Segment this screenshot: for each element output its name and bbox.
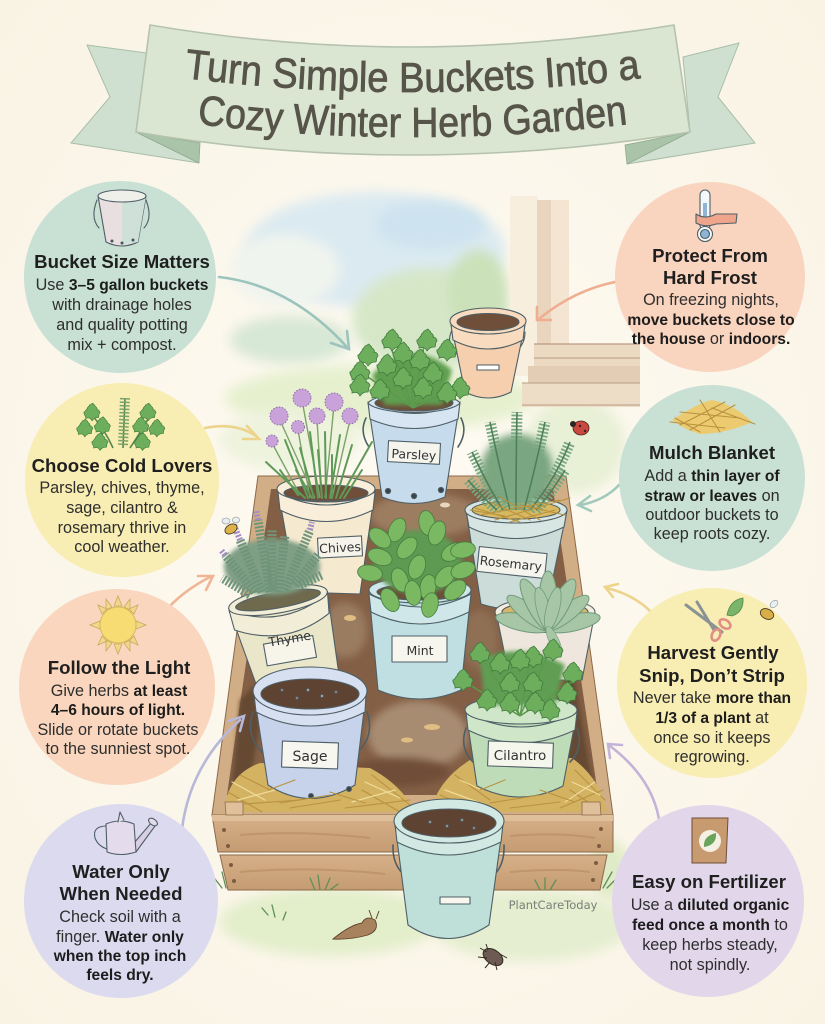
body text: keep herbs steady, <box>642 936 778 954</box>
body text: Add a thin layer of <box>644 467 780 485</box>
straw mulch in the bed <box>225 758 607 812</box>
body text: feels dry. <box>86 967 154 984</box>
label: Thyme: Thyme <box>266 627 312 650</box>
heading: Snip, Don’t Strip <box>639 665 785 686</box>
plant: sage herb <box>494 571 602 658</box>
heading: Protect From <box>652 245 768 266</box>
body text <box>627 291 795 348</box>
plant: thyme <box>221 510 322 595</box>
bucket: parsley <box>363 393 464 504</box>
body text: when the top inch <box>53 948 186 965</box>
title line 2: Cozy Winter Herb Garden <box>200 96 626 140</box>
body text: feed once a month to <box>632 916 788 934</box>
bucket: sage <box>250 667 370 798</box>
arrow: bucket size to garden <box>219 277 349 349</box>
critter: beetle <box>478 944 507 970</box>
critter: slug <box>333 910 379 939</box>
ribbon right tail <box>627 43 755 164</box>
arrow: cold lovers to chives <box>205 426 259 439</box>
raised bed: back, sides and soil <box>212 476 613 815</box>
arrow: fertilizer to cilantro <box>608 744 660 826</box>
bucket: thyme <box>227 579 343 699</box>
body text: to the sunniest spot. <box>46 740 190 758</box>
straw strands over bucket bases <box>268 780 575 808</box>
panel: water only when needed <box>24 804 218 998</box>
bucket: rosemary <box>465 497 567 609</box>
body text: Give herbs at least <box>51 682 187 700</box>
body text: and quality potting <box>56 316 188 334</box>
body text: the house or indoors. <box>632 330 790 348</box>
body text: sage, cilantro & <box>66 499 178 517</box>
bucket: front empty bucket <box>393 799 504 938</box>
heading: Harvest Gently <box>647 642 779 663</box>
plant: chives <box>266 389 372 498</box>
label: Cilantro: Cilantro <box>494 748 546 764</box>
body text: not spindly. <box>670 956 750 974</box>
body text: straw or leaves on <box>644 487 780 505</box>
heading: Bucket Size Matters <box>34 251 210 272</box>
body text <box>644 467 780 543</box>
heading: Hard Frost <box>663 267 757 288</box>
watermark: PlantCareToday <box>509 898 598 912</box>
body text: Use 3–5 gallon buckets <box>36 276 209 294</box>
panel: mulch blanket <box>619 385 805 571</box>
bucket: mint <box>369 577 471 699</box>
plant: mint <box>356 509 477 619</box>
title ribbon <box>70 24 756 164</box>
heading <box>60 861 182 904</box>
body text: Never take more than <box>633 689 791 707</box>
icon: herb sprigs <box>77 398 165 450</box>
icon: watering can <box>94 812 159 854</box>
plant: cilantro <box>453 639 583 721</box>
grass tufts <box>212 872 617 920</box>
body text: mix + compost. <box>67 336 177 354</box>
panel: harvest gently <box>617 588 807 778</box>
bucket: cilantro <box>464 696 579 797</box>
heading <box>639 642 785 686</box>
icon: sun <box>90 596 146 654</box>
heading <box>652 245 768 288</box>
arrow: mulch to rosemary <box>578 485 619 511</box>
raised bed: front boards <box>212 802 613 890</box>
bucket: peach by the steps <box>450 308 526 398</box>
body text: with drainage holes <box>51 296 192 314</box>
body text: cool weather. <box>74 538 170 556</box>
heading: Follow the Light <box>48 657 190 678</box>
bucket: chives <box>277 476 375 594</box>
body text: On freezing nights, <box>643 291 779 309</box>
label: Parsley: Parsley <box>391 446 437 463</box>
heading: Water Only <box>72 861 170 882</box>
ribbon folds <box>136 132 690 164</box>
title line 1: Turn Simple Buckets Into a <box>187 49 642 100</box>
plant: parsley <box>350 329 470 408</box>
arrow: water to sage <box>182 716 244 829</box>
bucket: sage herb container <box>495 598 595 680</box>
panel: easy on fertilizer <box>612 805 804 997</box>
body text: 1/3 of a plant at <box>655 709 769 727</box>
critter: bee <box>222 517 240 536</box>
label: Mint: Mint <box>406 643 434 658</box>
body text: Slide or rotate buckets <box>37 721 199 739</box>
body text <box>37 682 199 758</box>
body text: outdoor buckets to <box>645 506 779 524</box>
panel: follow the light <box>19 589 215 785</box>
arrow: harvest to sage herb <box>605 584 652 613</box>
critter: ladybug <box>570 421 589 435</box>
title curve guides <box>184 78 642 92</box>
arrow: frost to peach bucket <box>537 282 615 320</box>
label: Rosemary: Rosemary <box>479 553 543 574</box>
body text: move buckets close to <box>627 312 795 329</box>
icon: fertilizer bag <box>692 818 728 863</box>
heading: Choose Cold Lovers <box>32 455 212 476</box>
heading: Mulch Blanket <box>649 442 775 463</box>
body text: keep roots cozy. <box>654 525 770 543</box>
body text <box>631 896 790 974</box>
icon: scissors and leaf <box>686 598 743 642</box>
body text: Parsley, chives, thyme, <box>39 479 205 497</box>
icon: bucket <box>94 190 149 246</box>
scene: house wall and steps <box>510 196 640 407</box>
body text: 4–6 hours of light. <box>51 702 185 719</box>
heading: When Needed <box>60 883 182 904</box>
body text: regrowing. <box>674 748 750 766</box>
label: Sage: Sage <box>293 749 327 765</box>
body text: finger. Water only <box>56 928 184 946</box>
icon: straw pile <box>670 400 755 434</box>
scene: lawn washes <box>220 364 630 961</box>
arrow: light to thyme <box>169 576 213 607</box>
panel: bucket size matters <box>24 181 216 373</box>
body text: rosemary thrive in <box>58 519 186 537</box>
heading: Easy on Fertilizer <box>632 871 786 892</box>
body text: Use a diluted organic <box>631 896 790 914</box>
body text <box>633 689 791 766</box>
ribbon left tail <box>71 45 199 163</box>
body text: Check soil with a <box>59 908 181 926</box>
scene: sky and distant trees <box>230 192 508 372</box>
ribbon main panel <box>136 25 690 155</box>
plant: rosemary <box>468 412 570 522</box>
body text <box>36 276 209 354</box>
body text <box>53 908 186 984</box>
icon: thermometer with scarf <box>696 190 737 242</box>
icon: bee <box>759 599 779 621</box>
body text <box>39 479 205 556</box>
label: Chives: Chives <box>319 539 361 556</box>
body text: once so it keeps <box>654 729 770 747</box>
panel: choose cold lovers <box>25 383 219 577</box>
panel: protect from hard frost <box>615 182 805 372</box>
